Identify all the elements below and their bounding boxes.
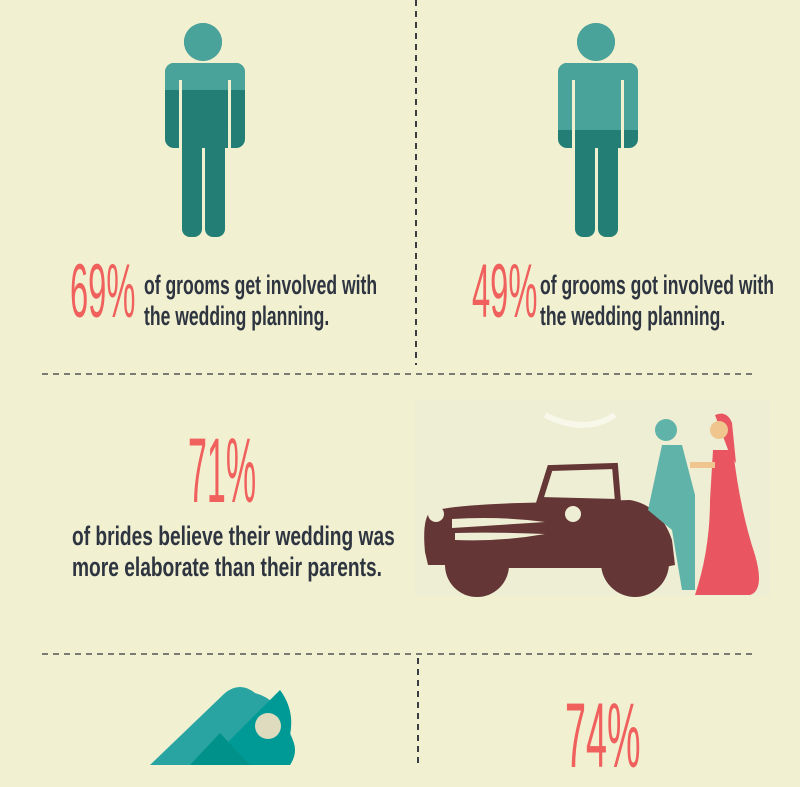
stat: 71%: 71% bbox=[188, 420, 256, 522]
stat: 71%: of brides believe their wedding was bbox=[72, 521, 395, 551]
icon: price tag bbox=[150, 687, 295, 765]
stat: 49%: of grooms got involved with bbox=[540, 270, 774, 300]
stat: 69% bbox=[70, 249, 377, 334]
stat: 49%: 49% bbox=[472, 249, 537, 334]
icon: groom figure right bbox=[558, 23, 638, 237]
stat: 69%: 69% bbox=[70, 249, 135, 334]
illustration: car and couple bbox=[424, 412, 759, 597]
stat: 74%: 74% bbox=[565, 685, 640, 787]
stat: 69%: the wedding planning. bbox=[144, 301, 329, 331]
stat: 49% bbox=[472, 249, 774, 334]
stat: 49%: the wedding planning. bbox=[540, 301, 725, 331]
stat: 69%: of grooms get involved with bbox=[144, 270, 377, 300]
stat: 71% bbox=[72, 420, 395, 582]
couple bbox=[648, 419, 695, 590]
stat: 71%: more elaborate than their parents. bbox=[72, 552, 382, 582]
icon: groom figure left bbox=[165, 23, 245, 237]
